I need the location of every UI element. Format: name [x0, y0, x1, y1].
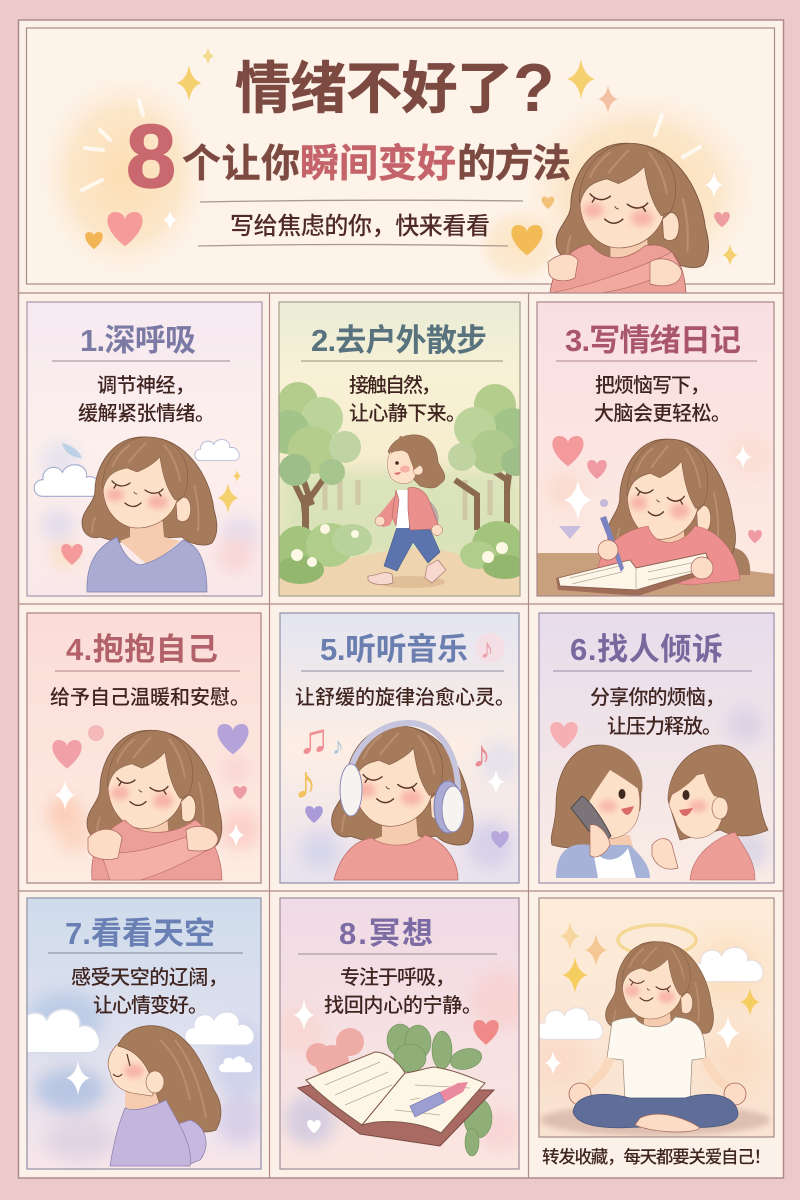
header panel — [26, 28, 774, 293]
grid lines — [18, 293, 783, 1178]
title line 1: ? — [513, 50, 555, 126]
panel 6: talk to someone — [539, 613, 774, 883]
description 3: 大脑会更轻松。 — [594, 402, 731, 425]
hearts — [85, 196, 730, 255]
description 8: 找回内心的宁静。 — [324, 994, 482, 1017]
illustration: girl looking up at clouds — [8, 992, 266, 1166]
heading 6: 6.找人倾诉 — [570, 632, 723, 667]
description 3: 把烦恼写下， — [595, 374, 710, 397]
subtitle: 写给焦虑的你，快来看看 — [230, 213, 490, 240]
title line 2: 个让你 — [182, 143, 300, 186]
panel 1: deep breathing — [27, 302, 262, 596]
illustration: girl hugging — [47, 724, 260, 880]
subtitle — [198, 200, 523, 246]
walking girl — [368, 435, 446, 588]
music notes: ♪ — [294, 756, 317, 808]
heading 3: 3.写情绪日记 — [565, 323, 741, 358]
panel 8: meditation — [276, 898, 530, 1169]
description 8 — [324, 966, 482, 1017]
panel 2: outdoor walk — [266, 302, 534, 596]
heading 2: 2.去户外散步 — [311, 323, 487, 358]
heading 4: 4.抱抱自己 — [66, 632, 218, 667]
description 1 — [78, 374, 215, 425]
description 2: 接触自然， — [349, 373, 441, 397]
panel 4: hug yourself — [27, 613, 261, 883]
description 7: 让心情变好。 — [93, 994, 208, 1017]
heading 8: 8.冥想 — [339, 916, 433, 951]
title line 2: 的方法 — [457, 143, 571, 186]
music notes: ♪ — [472, 734, 491, 776]
title line 2 — [126, 107, 571, 207]
description 1: 调节神经， — [97, 374, 195, 397]
description 2 — [349, 373, 466, 425]
illustration: girl breathing — [34, 437, 258, 592]
girl hugging herself — [548, 143, 708, 293]
illustration: meditating girl — [535, 898, 774, 1137]
panel 3: mood diary — [537, 302, 774, 596]
title line 2: 8 — [126, 107, 176, 207]
right friend — [652, 745, 768, 880]
description 6: 分享你的烦恼， — [590, 686, 725, 709]
illustration: girl with headphones — [294, 633, 522, 880]
music notes — [298, 642, 492, 798]
panel 5: listen to music — [280, 613, 522, 883]
closing message: 转发收藏，每天都要关爱自己！ — [542, 1147, 771, 1167]
description 8: 专注于呼吸， — [340, 966, 455, 989]
description 7: 感受天空的辽阔， — [71, 966, 228, 989]
description 1: 缓解紧张情绪。 — [78, 402, 215, 425]
heading 7: 7.看看天空 — [65, 916, 215, 951]
description 2: 让心静下来。 — [349, 402, 466, 425]
description 6 — [590, 686, 725, 738]
music notes: ♪ — [332, 733, 344, 760]
left friend — [551, 745, 650, 878]
music notes: ♫ — [298, 715, 330, 762]
description 7 — [71, 966, 228, 1017]
illustration: two friends talking — [550, 707, 770, 880]
title line 1: 情绪不好了 — [235, 57, 513, 120]
header glow — [40, 75, 758, 290]
panel 9: meditating girl and closing message — [535, 898, 774, 1167]
panel 7: look at the sky — [8, 898, 266, 1169]
music notes: ♪ — [480, 633, 494, 664]
heading 1: 1.深呼吸 — [80, 323, 196, 358]
illustration: girl writing — [537, 433, 774, 596]
illustration: forest walk — [280, 382, 520, 596]
description 4: 给予自己温暖和安慰。 — [50, 686, 250, 709]
illustration: open notebook and pen — [276, 970, 530, 1156]
title line 2: 瞬间变好 — [300, 143, 456, 186]
description 5: 让舒缓的旋律治愈心灵。 — [295, 686, 515, 709]
description 3 — [594, 374, 731, 425]
girl in profile — [108, 1026, 221, 1166]
sparkles — [82, 47, 738, 266]
description 6: 让压力释放。 — [607, 715, 722, 738]
heading 5: 5.听听音乐 — [320, 632, 468, 667]
